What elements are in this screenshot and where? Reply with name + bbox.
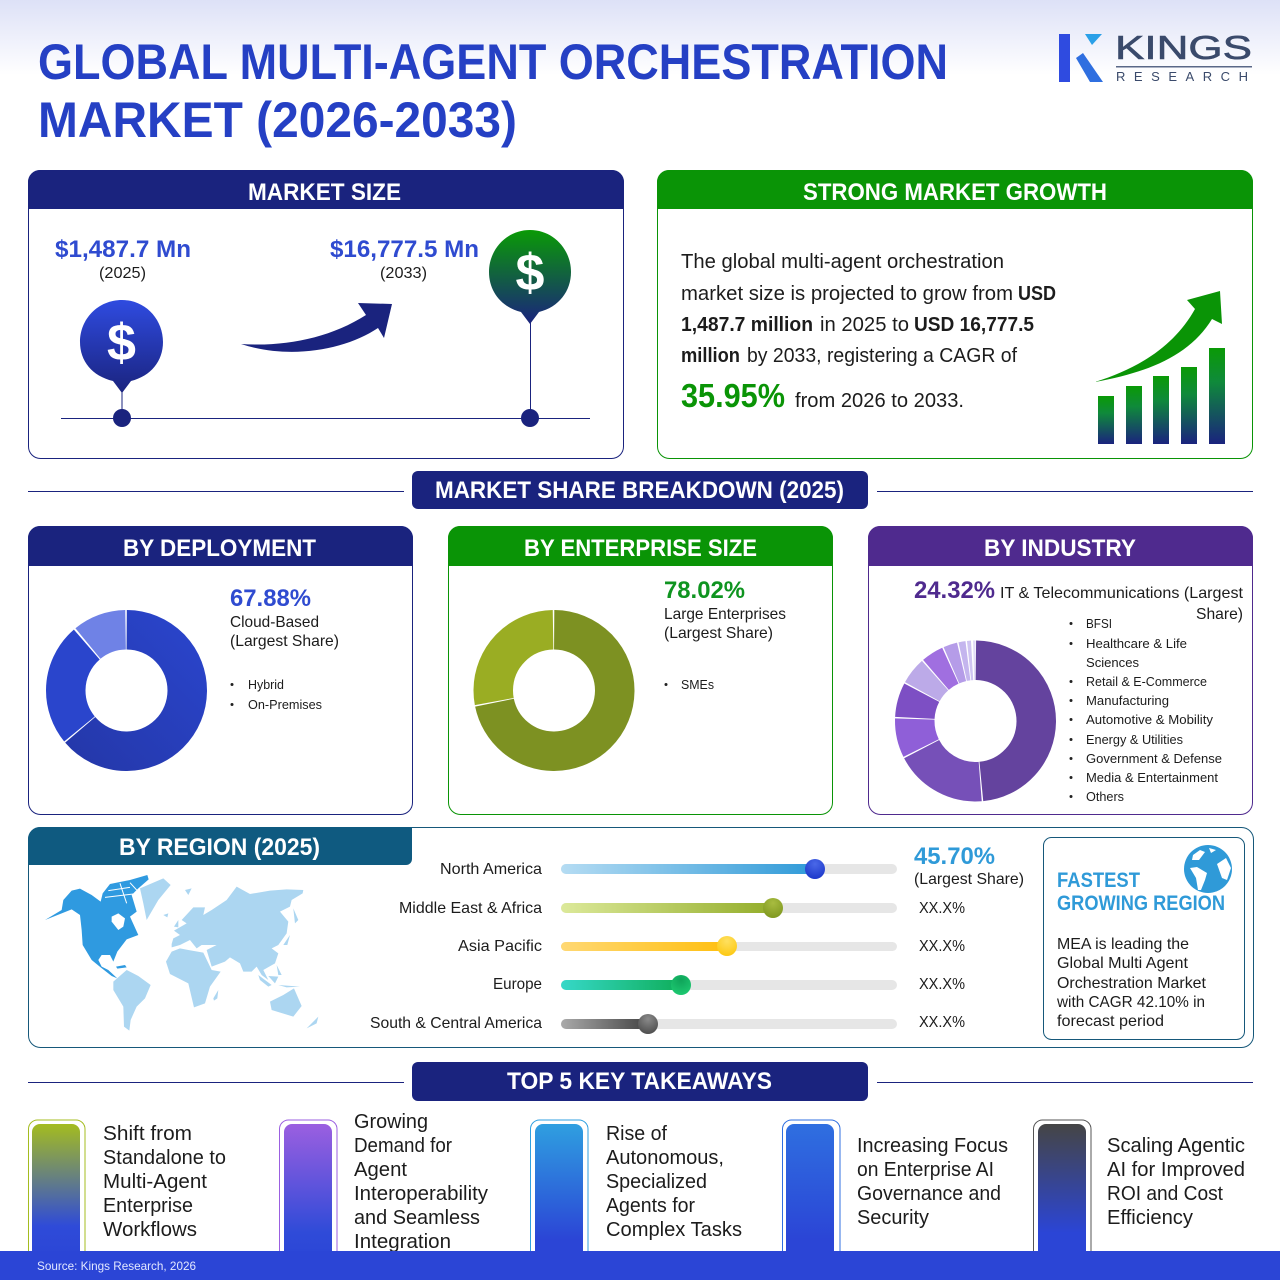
market size header: MARKET SIZE	[248, 179, 401, 206]
takeaway 5: AI for Improved	[1107, 1159, 1245, 1181]
icon: blue dollar pin	[80, 300, 163, 393]
industry legend: BFSI	[1086, 616, 1112, 631]
industry legend: Others	[1086, 789, 1124, 804]
takeaway 5	[1034, 1120, 1245, 1260]
region values	[914, 843, 1024, 1031]
callout: fastest growing region: Orchestration Market	[1057, 975, 1207, 992]
takeaway 2: and Seamless	[354, 1207, 480, 1229]
slider labels: Europe	[493, 976, 542, 993]
takeaway 1: Multi-Agent	[103, 1171, 207, 1193]
region values: XX.X%	[919, 1014, 965, 1031]
industry legend	[1070, 616, 1222, 804]
slider: asia pacific	[561, 936, 897, 956]
takeaway 1: Standalone to	[103, 1147, 226, 1169]
world map	[45, 875, 318, 1031]
deployment callout	[230, 585, 339, 650]
industry header: BY INDUSTRY	[984, 535, 1136, 562]
panel: by enterprise size	[448, 526, 833, 814]
arrow: market growth	[241, 303, 392, 352]
growth description	[681, 251, 1056, 414]
callout: fastest growing region: Global Multi Agent	[1057, 955, 1189, 972]
value 2025: $1,487.7 Mn	[55, 236, 191, 263]
icon: globe	[1184, 845, 1232, 893]
takeaway 1: Workflows	[103, 1219, 197, 1241]
growth description: 1,487.7 million	[681, 314, 813, 336]
takeaway 3: Rise of	[606, 1123, 667, 1145]
region values: XX.X%	[919, 938, 965, 955]
region header: BY REGION (2025)	[119, 834, 320, 861]
takeaway 2: Agent	[354, 1159, 407, 1181]
icon: green dollar pin: $	[516, 244, 545, 302]
industry legend: Energy & Utilities	[1086, 732, 1183, 747]
slider: south and central america	[561, 1014, 897, 1034]
footer	[0, 1251, 1280, 1280]
takeaway 1	[28, 1120, 226, 1260]
icon: growth bars and arrow	[1095, 291, 1225, 444]
donut chart: deployment	[65, 629, 188, 752]
logo: Kings Research: KINGS	[1115, 29, 1252, 66]
callout: fastest growing region: GROWING REGION	[1057, 892, 1225, 915]
industry legend: Government & Defense	[1086, 751, 1222, 766]
region values: XX.X%	[919, 900, 965, 917]
growth description: USD 16,777.5	[914, 314, 1034, 336]
value 2033	[330, 236, 479, 282]
title	[38, 34, 948, 148]
growth description: The global multi-agent orchestration	[681, 251, 1004, 273]
heading: top 5 key takeaways	[412, 1062, 868, 1101]
enterprise callout: 78.02%	[664, 577, 745, 604]
deployment legend: Hybrid	[248, 677, 284, 692]
callout: fastest growing region	[1044, 838, 1244, 1040]
title: MARKET (2026-2033)	[38, 92, 517, 148]
value 2025	[55, 236, 191, 282]
slider labels	[370, 861, 542, 1032]
growth description: million	[681, 345, 740, 367]
enterprise header: BY ENTERPRISE SIZE	[524, 535, 757, 562]
region values: (Largest Share)	[914, 871, 1024, 888]
industry header	[868, 526, 1253, 566]
title: GLOBAL MULTI-AGENT ORCHESTRATION	[38, 34, 948, 90]
deployment header	[28, 526, 413, 566]
deployment callout: Cloud-Based	[230, 614, 319, 631]
icon: blue dollar pin: $	[107, 314, 136, 372]
industry legend: Automotive & Mobility	[1086, 712, 1213, 727]
takeaway 2: Interoperability	[354, 1183, 488, 1205]
industry callout: 24.32%	[914, 577, 995, 604]
timeline	[61, 320, 590, 427]
takeaway 3: Autonomous,	[606, 1147, 724, 1169]
takeaway 3: Complex Tasks	[606, 1219, 742, 1241]
takeaway 2: Growing	[354, 1111, 428, 1133]
value 2033: $16,777.5 Mn	[330, 236, 479, 263]
heading: top 5 key takeaways: TOP 5 KEY TAKEAWAYS	[507, 1068, 772, 1095]
takeaway 4	[782, 1120, 1008, 1260]
takeaway 3	[530, 1120, 742, 1260]
takeaway 1: Shift from	[103, 1123, 192, 1145]
takeaway 2	[280, 1111, 488, 1260]
industry callout	[914, 577, 1244, 623]
takeaway 4: Increasing Focus	[857, 1135, 1008, 1157]
slider labels: South & Central America	[370, 1015, 542, 1032]
panel: by region	[28, 827, 1254, 1048]
enterprise callout: Large Enterprises	[664, 606, 786, 623]
enterprise callout: (Largest Share)	[664, 625, 773, 642]
takeaway 2: Integration	[354, 1231, 451, 1253]
callout: fastest growing region: forecast period	[1057, 1013, 1164, 1030]
map: rest of world	[113, 878, 318, 1031]
slider: middle east and africa	[561, 898, 897, 918]
deployment legend	[230, 677, 322, 712]
industry legend: Healthcare & Life	[1086, 636, 1187, 651]
enterprise header	[448, 526, 833, 566]
takeaway 5: ROI and Cost	[1107, 1183, 1223, 1205]
slider labels: North America	[440, 861, 542, 878]
value 2025: (2025)	[99, 265, 146, 282]
growth description: market size is projected to grow from	[681, 283, 1013, 305]
takeaway 4: Governance and	[857, 1183, 1001, 1205]
industry callout: IT & Telecommunications (Largest	[1000, 585, 1244, 602]
takeaway 5: Efficiency	[1107, 1207, 1193, 1229]
takeaway 5: Scaling Agentic	[1107, 1135, 1245, 1157]
enterprise legend: SMEs	[681, 677, 714, 692]
slider labels: Asia Pacific	[458, 938, 542, 955]
logo: Kings Research	[1059, 29, 1252, 84]
panel: by deployment	[28, 526, 413, 814]
panel: strong market growth	[657, 170, 1253, 458]
value 2033: (2033)	[380, 265, 427, 282]
takeaway 2: Demand for	[354, 1135, 452, 1157]
panel: by industry	[868, 526, 1253, 814]
region values: XX.X%	[919, 976, 965, 993]
callout: fastest growing region: FASTEST	[1057, 869, 1140, 892]
industry callout: Share)	[1196, 606, 1243, 623]
industry legend: Manufacturing	[1086, 693, 1169, 708]
region header	[28, 827, 412, 865]
takeaway 3: Agents for	[606, 1195, 695, 1217]
deployment callout: 67.88%	[230, 585, 311, 612]
growth description: 35.95%	[681, 377, 785, 414]
logo: Kings Research: RESEARCH	[1116, 69, 1248, 84]
growth description: from 2026 to 2033.	[795, 390, 964, 412]
deployment legend: On-Premises	[248, 697, 322, 712]
heading: market share breakdown: MARKET SHARE BREAKDOWN (2025)	[435, 477, 844, 504]
industry legend: Media & Entertainment	[1086, 770, 1218, 785]
takeaway 4: Security	[857, 1207, 929, 1229]
growth header	[657, 170, 1253, 209]
enterprise legend	[664, 677, 714, 692]
panel: market size	[28, 170, 624, 458]
callout: fastest growing region: MEA is leading the	[1057, 936, 1189, 953]
donut chart: industry	[914, 659, 1037, 783]
donut chart: enterprise size	[493, 629, 615, 752]
takeaway 1: Enterprise	[103, 1195, 193, 1217]
takeaway 3: Specialized	[606, 1171, 707, 1193]
region values: 45.70%	[914, 843, 995, 870]
growth header: STRONG MARKET GROWTH	[803, 179, 1107, 206]
deployment header: BY DEPLOYMENT	[123, 535, 316, 562]
growth description: USD	[1018, 283, 1056, 305]
growth description: in 2025 to	[820, 314, 909, 336]
enterprise callout	[664, 577, 786, 642]
takeaway 4: on Enterprise AI	[857, 1159, 994, 1181]
market size header	[28, 170, 624, 209]
industry legend: Retail & E-Commerce	[1086, 674, 1207, 689]
deployment callout: (Largest Share)	[230, 633, 339, 650]
heading: market share breakdown	[412, 471, 868, 509]
slider: europe	[561, 975, 897, 995]
footer: Source: Kings Research, 2026	[37, 1259, 196, 1273]
slider: north america	[561, 859, 897, 879]
industry legend: Sciences	[1086, 655, 1140, 670]
growth description: by 2033, registering a CAGR of	[747, 345, 1017, 367]
callout: fastest growing region: with CAGR 42.10% in	[1056, 994, 1205, 1011]
slider labels: Middle East & Africa	[399, 900, 542, 917]
map: north america highlighted	[45, 875, 149, 978]
icon: green dollar pin	[489, 230, 571, 324]
